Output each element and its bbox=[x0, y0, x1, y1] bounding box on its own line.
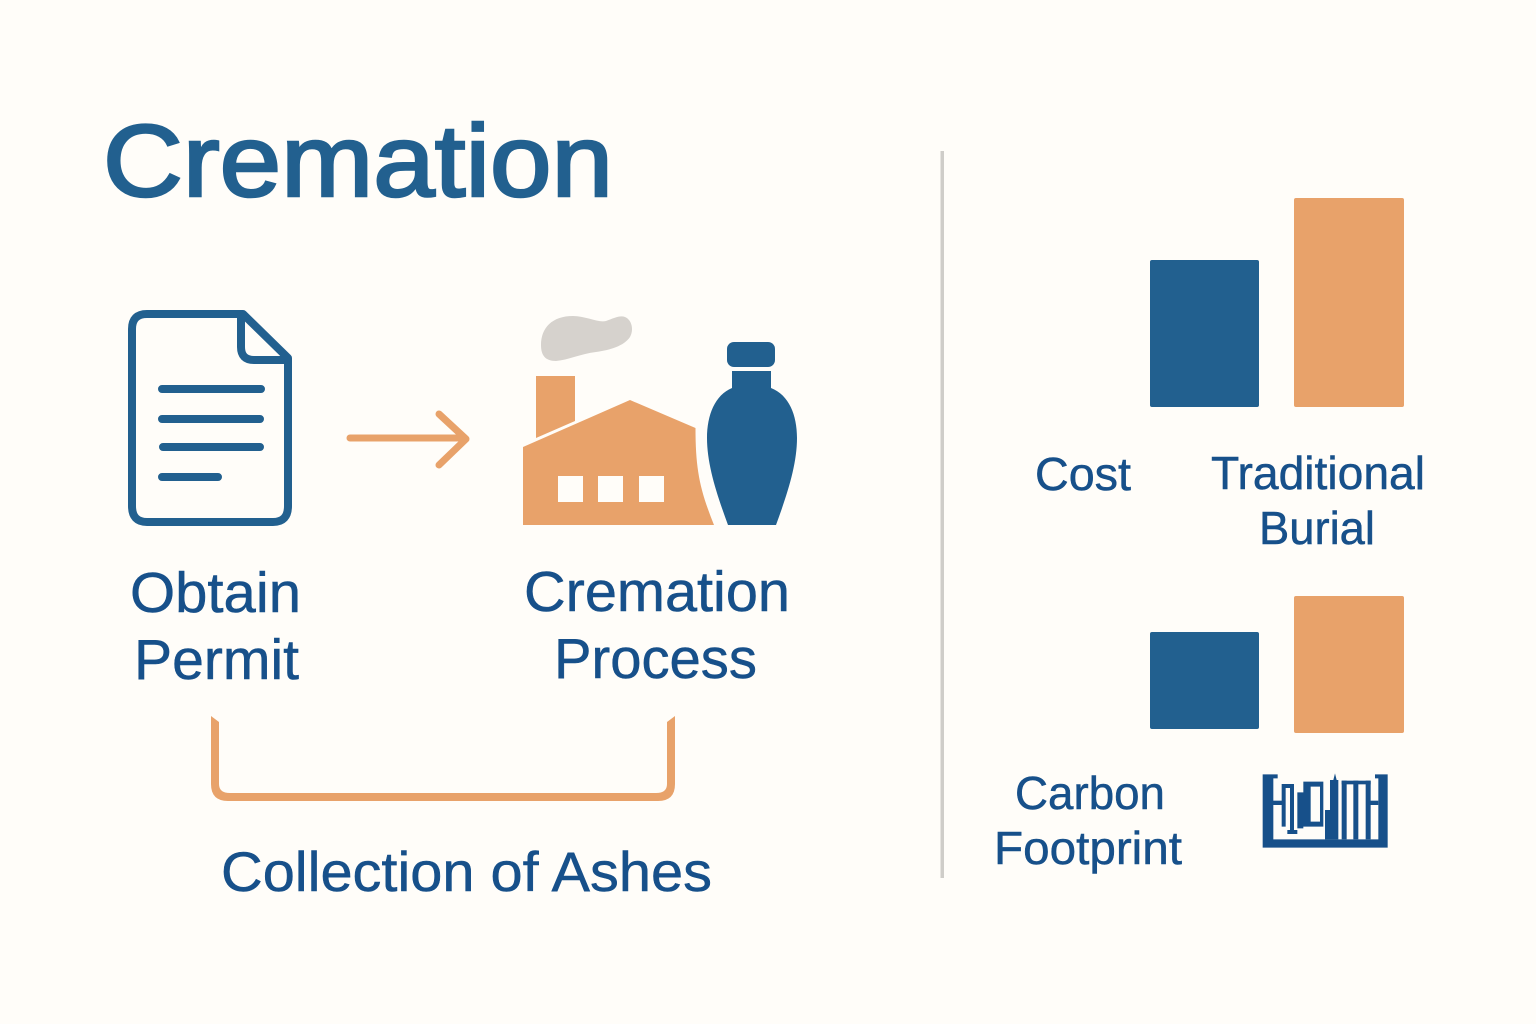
label: cremation process bbox=[524, 560, 790, 691]
bracket bbox=[211, 716, 675, 801]
label: cremation process: Process bbox=[554, 627, 757, 691]
label: obtain permit: Obtain bbox=[130, 561, 301, 625]
panel: process bbox=[130, 314, 797, 903]
icon: garbled barcode mark bbox=[1263, 773, 1388, 848]
label: carbon footprint bbox=[994, 767, 1182, 874]
icon: factory bbox=[523, 376, 714, 525]
title: Cremation bbox=[103, 104, 613, 218]
divider bbox=[940, 151, 944, 878]
panel: comparison bbox=[994, 198, 1425, 874]
label: traditional burial: Traditional bbox=[1211, 447, 1425, 499]
icon: permit document bbox=[132, 314, 288, 522]
label: obtain permit: Permit bbox=[134, 628, 299, 692]
label: cost: Cost bbox=[1035, 448, 1131, 500]
bar chart: cost bbox=[1150, 198, 1404, 407]
label: obtain permit bbox=[130, 561, 301, 692]
label: carbon footprint: Footprint bbox=[994, 822, 1182, 874]
arrow: permit to cremation bbox=[350, 414, 466, 465]
icon: smoke bbox=[541, 316, 632, 361]
icon: urn bbox=[707, 342, 797, 525]
label: traditional burial: Burial bbox=[1259, 502, 1375, 554]
label: carbon footprint: Carbon bbox=[1015, 767, 1165, 819]
label: collection of ashes: Collection of Ashes bbox=[221, 840, 712, 903]
bar chart: carbon footprint bbox=[1150, 596, 1404, 733]
label: cremation process: Cremation bbox=[524, 560, 790, 624]
label: traditional burial bbox=[1211, 447, 1425, 554]
